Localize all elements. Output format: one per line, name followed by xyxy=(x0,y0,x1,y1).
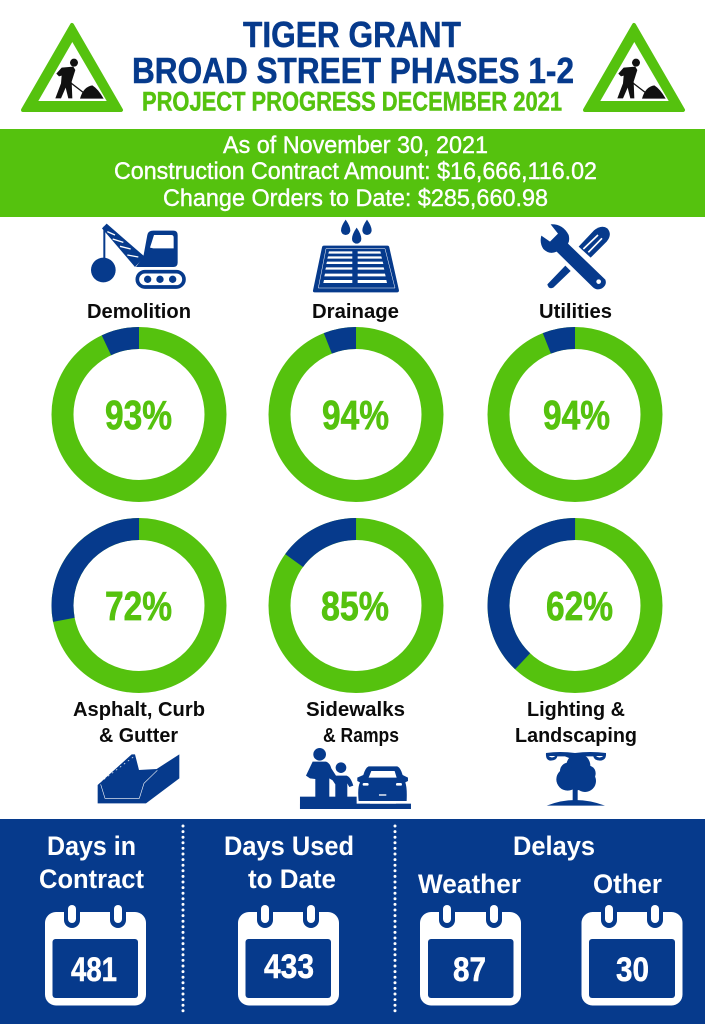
donut chart: sidewalks and ramps 85%: 85% xyxy=(321,583,389,629)
label: lighting and landscaping xyxy=(515,699,637,747)
heading: days used to date: to Date xyxy=(248,864,336,894)
icon: street lamp and tree xyxy=(546,752,606,806)
calendar: weather delays 87 xyxy=(420,900,521,1006)
calendar: days used 433 xyxy=(238,900,339,1006)
icon: pedestrians and car xyxy=(300,748,411,809)
label: asphalt, curb and gutter xyxy=(73,699,205,747)
calendar: days in contract 481: 481 xyxy=(71,951,117,989)
donut chart: demolition 93%: 93% xyxy=(105,392,172,438)
donut chart: utilities 94% xyxy=(476,315,674,514)
label: asphalt, curb and gutter: Asphalt, Curb xyxy=(73,699,205,721)
icon: right worker warning sign xyxy=(585,25,683,110)
panel: contract summary band: As of November 30, 2021 xyxy=(223,132,488,159)
donut chart: demolition 93% xyxy=(37,313,241,516)
heading: days in contract xyxy=(39,831,144,894)
label: sidewalks and ramps xyxy=(306,699,405,747)
label: sidewalks and ramps: Sidewalks xyxy=(306,699,405,721)
title: TIGER GRANT xyxy=(243,14,461,55)
label: lighting and landscaping: Lighting & xyxy=(527,699,625,721)
label: sidewalks and ramps: & Ramps xyxy=(323,725,399,747)
icon: curb and gutter xyxy=(98,754,179,803)
title xyxy=(132,14,574,116)
donut chart: drainage 94% xyxy=(257,315,455,514)
heading: delays: Delays xyxy=(513,831,595,861)
title: PROJECT PROGRESS DECEMBER 2021 xyxy=(142,86,562,116)
donut chart: sidewalks and ramps 85% xyxy=(249,499,463,712)
label: drainage: Drainage xyxy=(312,301,399,323)
label: asphalt, curb and gutter: & Gutter xyxy=(99,725,178,747)
heading: days in contract: Days in xyxy=(47,831,136,861)
label: demolition: Demolition xyxy=(87,301,191,323)
panel: contract summary band: Construction Contract Amount: $16,666,116.02 xyxy=(114,158,597,185)
heading: days in contract: Contract xyxy=(39,864,144,894)
heading: other delays: Other xyxy=(593,869,662,899)
heading: days used to date xyxy=(224,831,354,894)
calendar: other delays 30 xyxy=(582,900,682,1006)
calendar: days used 433: 433 xyxy=(264,948,314,986)
icon: drainage grate xyxy=(313,220,399,292)
panel: contract summary band: Change Orders to Date: $285,660.98 xyxy=(163,185,548,212)
donut chart: asphalt, curb and gutter 72% xyxy=(50,516,228,695)
panel: contract summary band xyxy=(0,129,705,217)
label: utilities: Utilities xyxy=(539,301,612,323)
icon: left worker warning sign xyxy=(23,25,121,110)
calendar: days in contract 481 xyxy=(45,900,146,1006)
label: lighting and landscaping: Landscaping xyxy=(515,725,637,747)
donut chart: asphalt, curb and gutter 72%: 72% xyxy=(105,583,172,629)
panel: schedule xyxy=(0,819,705,1024)
calendar: other delays 30: 30 xyxy=(616,951,649,989)
donut chart: lighting and landscaping 62% xyxy=(467,497,683,714)
donut chart: lighting and landscaping 62%: 62% xyxy=(546,583,613,629)
donut chart: utilities 94%: 94% xyxy=(543,392,610,438)
heading: weather delays: Weather xyxy=(418,869,521,899)
heading: days used to date: Days Used xyxy=(224,831,354,861)
icon: demolition crane xyxy=(91,224,184,287)
title: BROAD STREET PHASES 1-2 xyxy=(132,50,574,91)
calendar: weather delays 87: 87 xyxy=(453,951,486,989)
icon: utilities wrench and screwdriver xyxy=(541,224,610,289)
donut chart: drainage 94%: 94% xyxy=(322,392,389,438)
